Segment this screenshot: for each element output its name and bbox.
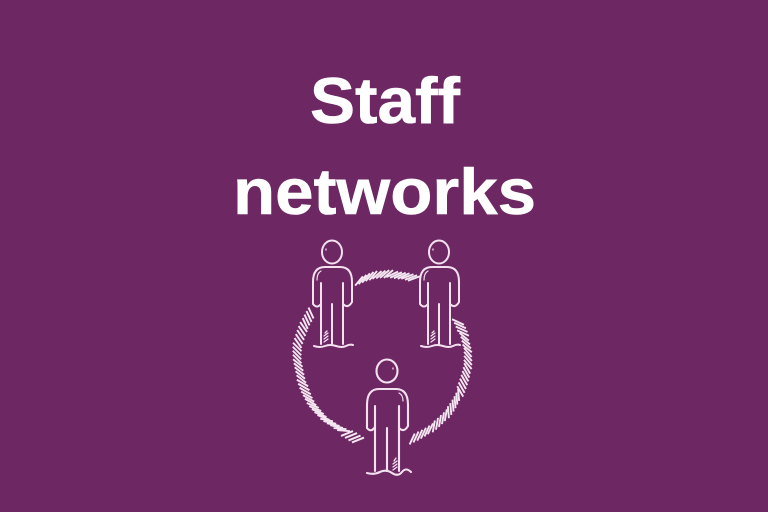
left arc [297, 313, 358, 440]
icon: person top right [420, 240, 460, 347]
right arc [412, 322, 468, 439]
title: Staff [310, 64, 460, 137]
icon: person top left [313, 240, 353, 347]
icon: person bottom centre [367, 360, 411, 475]
top arc [359, 274, 414, 281]
title [233, 64, 536, 228]
title: networks [233, 155, 536, 228]
icon: hatched network ring [297, 274, 468, 440]
